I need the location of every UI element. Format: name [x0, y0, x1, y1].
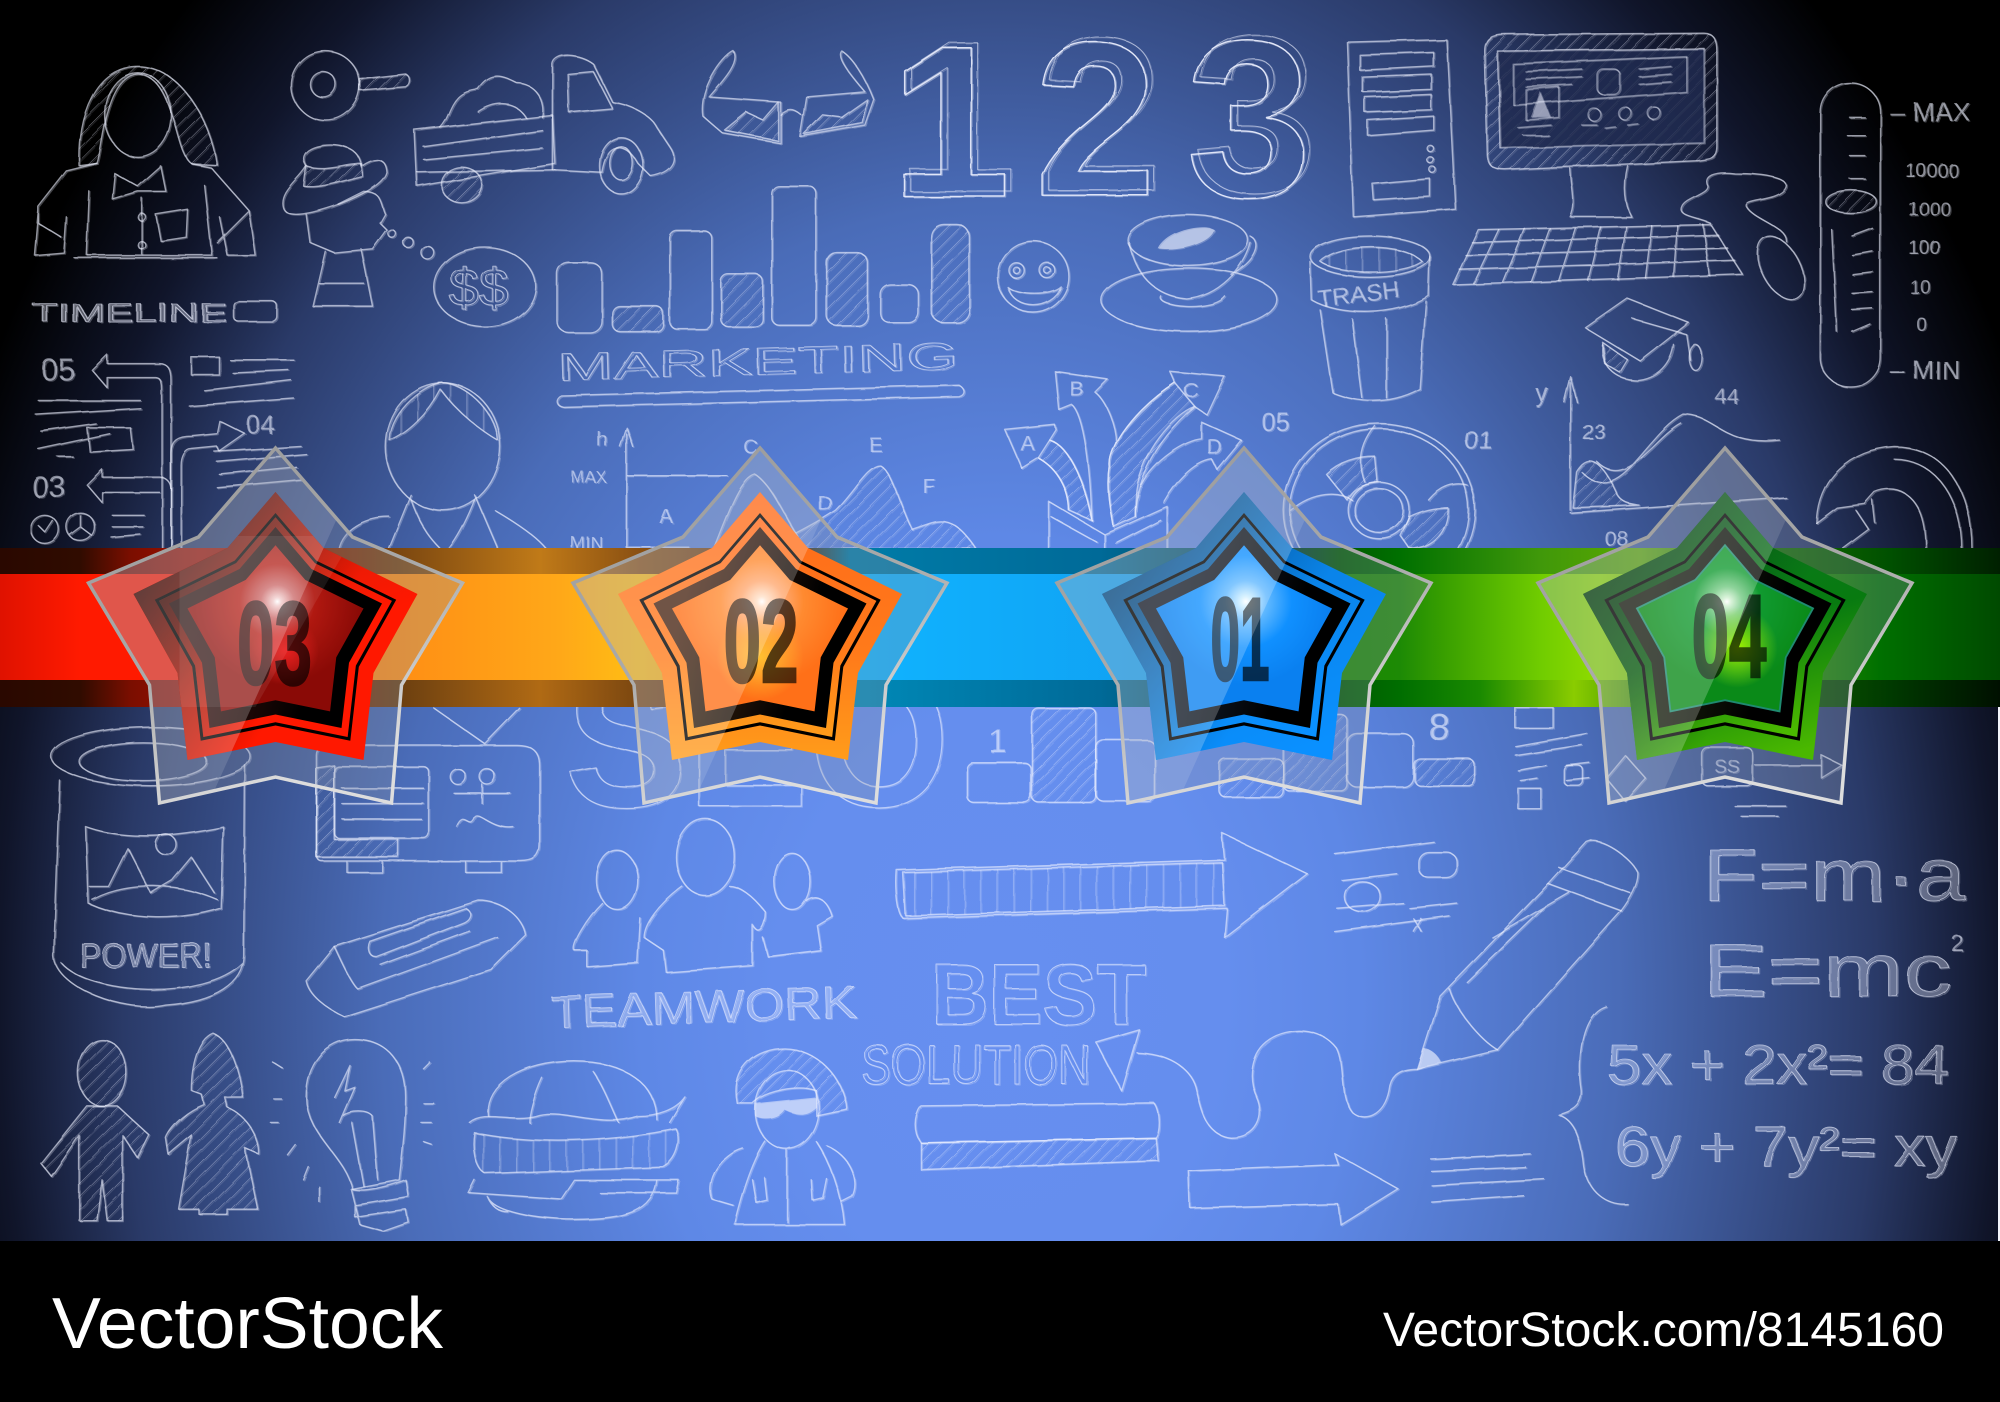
doodle: marketing label: MARKETING: [556, 335, 959, 389]
doodle: area chart: 44: [1714, 383, 1738, 408]
doodle: swirl arrow: [1816, 446, 1972, 548]
inner star layers: [1102, 492, 1386, 760]
doodle: sunglasses: [702, 51, 874, 143]
colour ribbon: [0, 548, 2000, 707]
doodle: mountain line chart: D: [818, 493, 832, 515]
doodle: smiley: [997, 241, 1069, 312]
doodle: teamwork label: TEAMWORK: [550, 975, 858, 1038]
doodle: money bubble: $$: [449, 259, 509, 318]
number 03: 03: [237, 578, 312, 710]
doodle: equations: 5x + 2x²= 84: [1607, 1033, 1949, 1096]
doodle: thermometer scale: – MIN: [1890, 357, 1960, 385]
doodle: thermometer scale: 0: [1916, 314, 1926, 335]
doodle: timeline flow chart: 05: [41, 353, 75, 387]
doodle: numbers 1 2 3: 3: [1186, 0, 1311, 244]
inner star layers: [134, 492, 418, 760]
doodle: big right arrow: [896, 833, 1307, 937]
doodle: pencil with squiggle: [1096, 841, 1638, 1138]
doodle: physics formulas: 2: [1952, 931, 1964, 957]
doodle: notes block under star four: SS: [1714, 757, 1740, 778]
ribbon main colour: [0, 574, 2000, 680]
number 02: 02: [724, 576, 798, 708]
doodle: thermometer scale: [1820, 83, 1971, 386]
doodle: bar chart: [557, 186, 969, 333]
doodle: direction arrows A B C D: C: [1184, 378, 1199, 403]
doodle: thermometer scale: – MAX: [1890, 99, 1971, 127]
star badge 01: [1044, 442, 1431, 810]
doodle: area chart: [1536, 376, 1786, 551]
glass star frame: [76, 442, 462, 810]
doodle: person with tie: [338, 383, 546, 548]
ribbon bottom shade: [0, 680, 2000, 707]
doodle: graduation cap: [1585, 298, 1702, 380]
doodle: mountain line chart: MIN: [570, 532, 603, 552]
inner star layers: [1583, 492, 1867, 760]
doodle: trash can: [1310, 236, 1430, 401]
doodle: marketing label: [556, 335, 964, 407]
doodle: mountain line chart: E: [869, 435, 882, 457]
doodle: step blocks: 1: [989, 724, 1007, 761]
doodle: timeline flow chart: 03: [32, 470, 66, 504]
glass reflection: [134, 492, 342, 760]
doodle: physics formulas: E=mc: [1703, 929, 1952, 1012]
star badge 04: [1525, 442, 1912, 810]
doodle: numbers 1 2 3: [890, 0, 1317, 244]
doodle: mountain line chart: [570, 427, 976, 552]
glass star frame: [560, 442, 947, 810]
doodle: equations: 6y + 7y²= xy: [1615, 1115, 1957, 1178]
doodle: direction arrows A B C D: D: [1207, 434, 1222, 459]
doodle: area chart: 23: [1582, 419, 1606, 444]
glass reflection: [1102, 492, 1292, 760]
brand name: VectorStock: [52, 1284, 444, 1364]
doodle: mountain line chart: A: [659, 506, 673, 528]
doodle: power can: [51, 727, 250, 1007]
doodle: numbers 1 2 3: 1: [897, 0, 1017, 237]
doodle: outline arrow and lines: [1189, 1153, 1543, 1224]
doodle: money bubble: [434, 247, 536, 327]
ribbon top shade: [0, 548, 2000, 574]
doodle: SEO letters: SEO: [565, 633, 950, 847]
doodle: timeline label: TIMELINE: [32, 299, 227, 327]
glass star frame: [1044, 442, 1431, 810]
glass reflection: [618, 492, 808, 760]
doodle: three teammates: [574, 819, 832, 972]
doodle: mountain line chart: C: [744, 437, 758, 459]
doodle: man with shades: [710, 1048, 855, 1224]
doodle: frying pan: [291, 51, 409, 120]
doodle: trash can: TRASH: [1316, 277, 1401, 313]
doodle: mountain line chart: h: [597, 429, 608, 451]
doodle: woman with veil: [34, 66, 255, 258]
doodle: equations: [1607, 1033, 1957, 1178]
doodle: coffee cup and saucer: [1101, 214, 1277, 332]
star badge 03: [76, 442, 462, 810]
doodle: projector: [316, 708, 540, 872]
doodle: power can: POWER!: [79, 937, 212, 975]
glass star frame: [1525, 442, 1912, 810]
doodle: desktop monitor, keyboard and mouse: [1453, 33, 1814, 307]
doodle: timeline flow chart: [31, 353, 306, 548]
doodle: thermometer scale: 10: [1909, 277, 1931, 298]
doodle: hamburger: [468, 1061, 685, 1219]
doodle: thermometer scale: 100: [1908, 238, 1940, 259]
doodle: eraser: [306, 901, 526, 1017]
doodle: direction arrows A B C D: [1005, 371, 1241, 548]
doodle: mountain line chart: MAX: [570, 467, 606, 486]
doodle: film reel with numbers: 01: [1464, 427, 1493, 455]
doodle: pill with hatched base: [915, 1103, 1159, 1170]
doodle: physics formulas: [1703, 834, 1967, 1012]
doodle: direction arrows A B C D: B: [1069, 375, 1083, 400]
doodle: numbers 1 2 3: 2: [1034, 0, 1156, 242]
image url: VectorStock.com/8145160: [1383, 1304, 1944, 1357]
footer watermark bar: [0, 1241, 2000, 1402]
doodle: film reel with numbers: 05: [1261, 409, 1290, 437]
doodle: text notes: [1334, 842, 1457, 931]
doodle: mountain line chart: F: [922, 475, 935, 497]
glass reflection: [1583, 492, 1773, 760]
doodle: light bulb: [270, 1040, 434, 1231]
doodle: solution label: SOLUTION: [861, 1033, 1091, 1096]
doodle: area chart: y: [1536, 380, 1549, 408]
doodle: pickup truck: [415, 55, 674, 203]
doodle: step blocks: [967, 706, 1474, 802]
doodle: physics formulas: F=m·a: [1703, 834, 1967, 917]
doodle: thermometer scale: 1000: [1908, 200, 1951, 221]
doodle: direction arrows A B C D: A: [1020, 430, 1035, 455]
doodle: thermometer scale: 10000: [1906, 161, 1959, 182]
doodle: film reel with numbers: [1261, 409, 1493, 597]
doodle: numbers 1 2 3: 1: [890, 0, 1011, 242]
inner star layers: [618, 492, 902, 760]
doodle: timeline flow chart: 04: [246, 412, 275, 440]
right edge sliver: [1998, 707, 2000, 1241]
doodle: notes block under star four: [1515, 708, 1842, 816]
doodle: best label: BEST: [931, 946, 1145, 1043]
doodle: area chart: 08: [1605, 526, 1629, 551]
star badge 02: [560, 442, 947, 810]
number 01: 01: [1210, 574, 1270, 706]
doodle: step blocks: 8: [1429, 706, 1450, 749]
doodle: algebra brace: [1559, 1006, 1628, 1204]
number 04: 04: [1692, 571, 1766, 703]
doodle: man and woman: [41, 1033, 259, 1221]
doodle: man with hat thinking: [282, 145, 434, 306]
doodle: timeline label: [32, 299, 277, 327]
doodle: computer tower: [1347, 40, 1455, 217]
